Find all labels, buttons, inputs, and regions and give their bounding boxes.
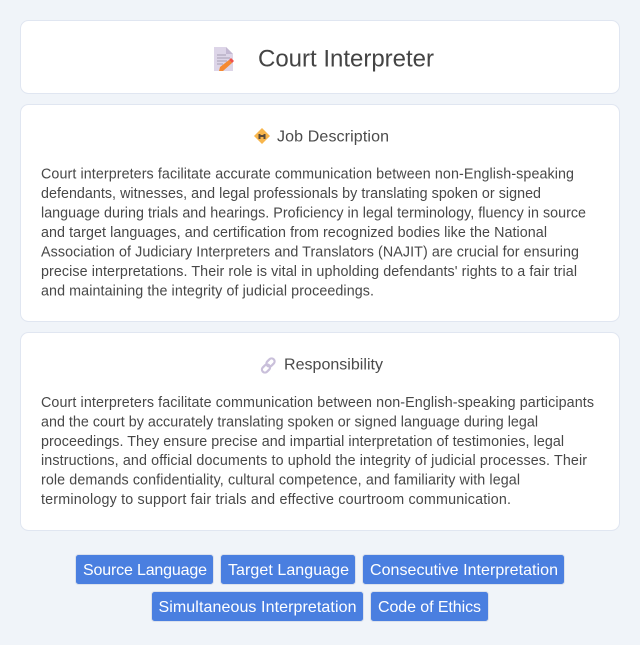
text block: job description: precise interpretations. Their role is vital in upholding defendants' rights to a fair trial <box>41 264 577 280</box>
tag: code of ethics <box>370 592 488 622</box>
title: Court Interpreter <box>258 46 434 72</box>
icon: chain link <box>261 357 276 374</box>
text block: responsibility: Court interpreters facilitate communication between non-English-speaking participants <box>41 395 594 411</box>
tag: target language: Target Language <box>228 562 349 579</box>
tag: source language <box>76 554 214 584</box>
heading: responsibility: Responsibility <box>284 356 383 374</box>
text block: job description: Association of Judiciary Interpreters and Translators (NAJIT) are crucial for ensuring <box>41 244 579 260</box>
icon: orange diamond <box>254 128 270 144</box>
text block: responsibility: role demands confidentiality, cultural competence, and familiarity with legal <box>41 472 520 488</box>
heading: job description: Job Description <box>277 128 389 146</box>
panel: job description <box>20 104 620 322</box>
text block: job description: defendants, witnesses, and legal professionals by translating spoken or signed <box>41 186 541 202</box>
text block: responsibility: terminology to support fair trials and effective courtroom communication. <box>41 492 511 508</box>
text block: responsibility: proceedings. They ensure precise and impartial interpretation of testimonies, legal <box>41 434 564 450</box>
tag: simultaneous interpretation: Simultaneous Interpretation <box>158 599 356 616</box>
tag: source language: Source Language <box>83 562 207 579</box>
panel: responsibility <box>20 332 620 530</box>
tag: consecutive interpretation <box>362 554 564 584</box>
text block: responsibility <box>41 395 594 508</box>
text block: job description: and target languages, and certification from recognized bodies like the National <box>41 225 547 241</box>
text block: job description: Court interpreters facilitate accurate communication between non-English-speaking <box>41 166 574 182</box>
tag: code of ethics: Code of Ethics <box>378 599 481 616</box>
tag: target language <box>220 554 356 584</box>
text block: job description: language during trials and hearings. Proficiency in legal terminology, fluency in source <box>41 206 586 222</box>
tag: simultaneous interpretation <box>152 592 364 622</box>
tag: consecutive interpretation: Consecutive Interpretation <box>370 562 558 579</box>
text block: job description: and maintaining the integrity of judicial proceedings. <box>41 284 374 300</box>
text block: job description <box>41 166 586 300</box>
icon: document with pencil <box>214 47 234 71</box>
panel: title card <box>20 20 620 94</box>
text block: responsibility: and the court by accurately translating spoken or signed language during legal <box>41 414 538 430</box>
text block: responsibility: instructions, and official documents to uphold the integrity of judicial processes. Their <box>41 453 587 469</box>
